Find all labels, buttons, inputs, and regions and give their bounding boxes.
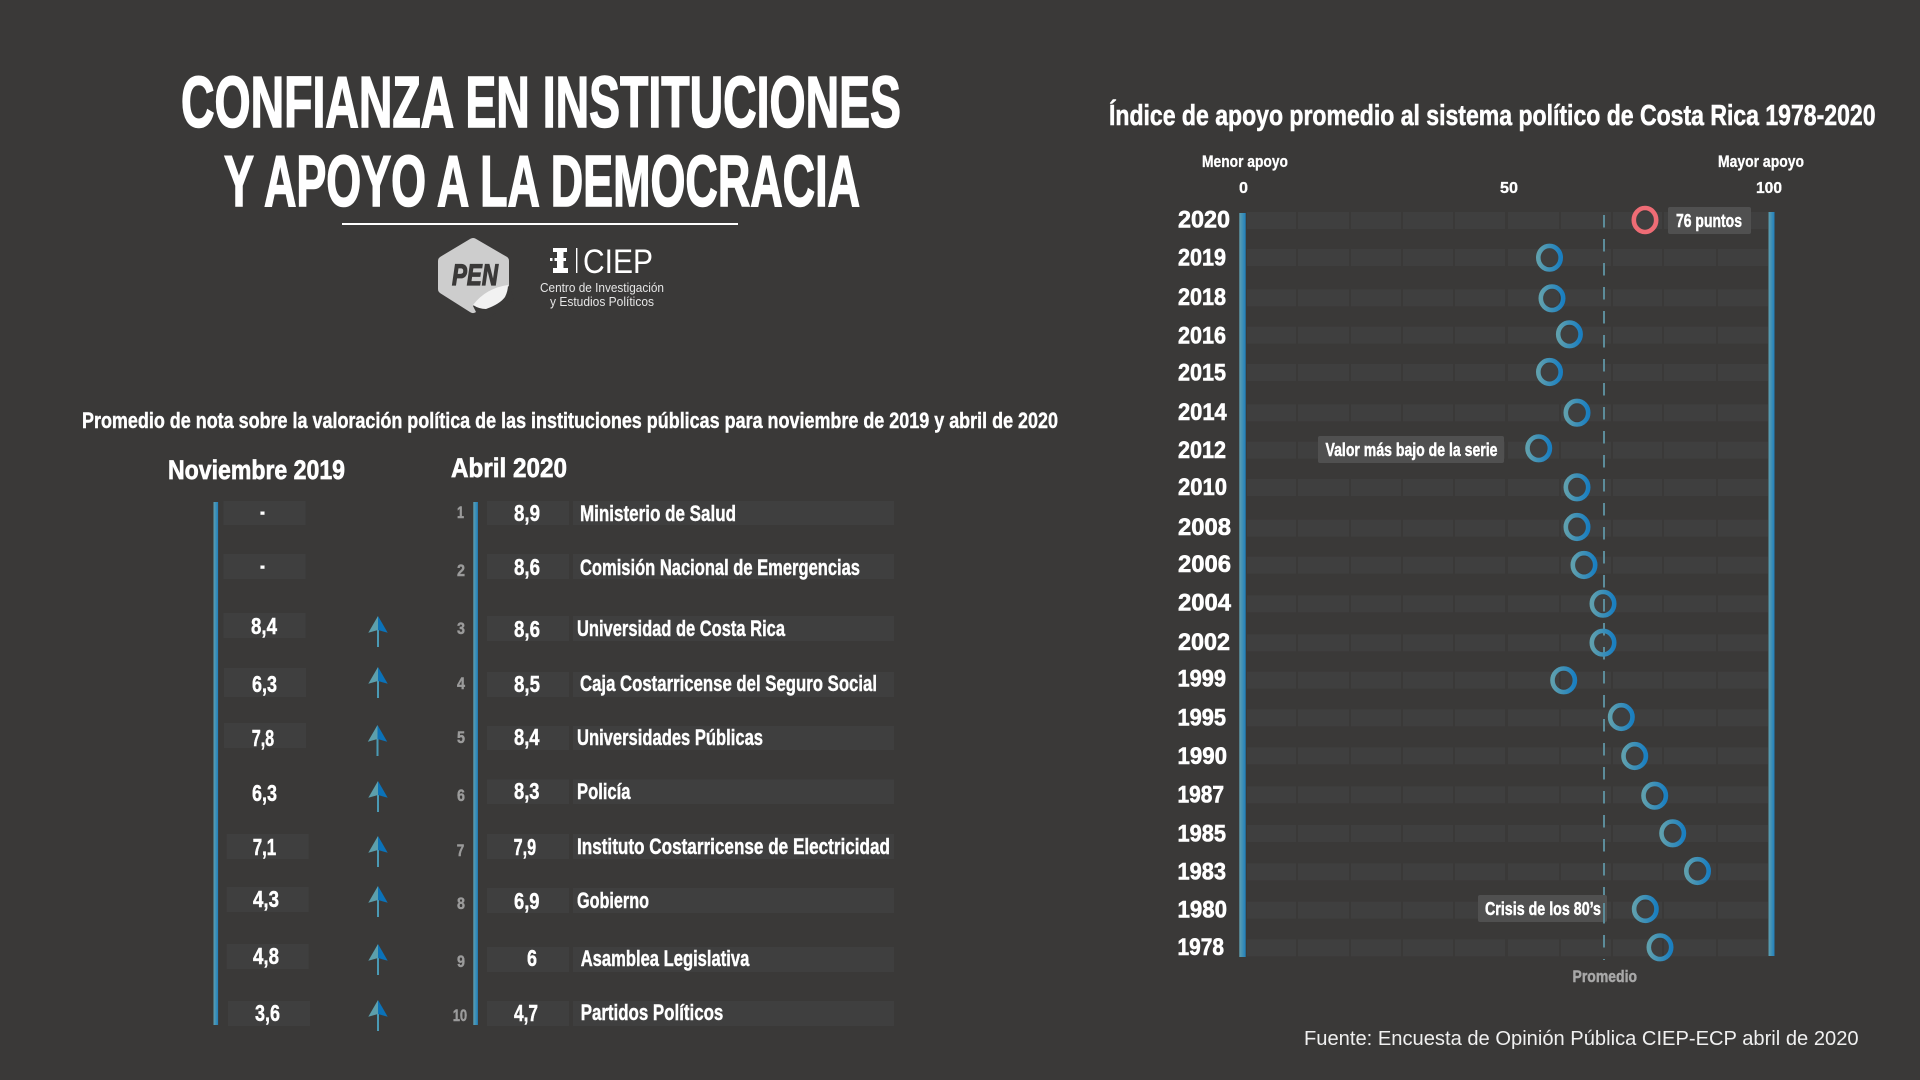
- year labels: 2014: [1178, 399, 1227, 426]
- row 10: Partidos Políticos: Partidos Políticos: [581, 1000, 723, 1025]
- callout: 76 puntos: [1668, 207, 1751, 234]
- value row 6: 6,3: [252, 780, 277, 806]
- row 5: Universidades Públicas: [457, 724, 894, 750]
- value row 3: [224, 613, 306, 639]
- chart: average dashed line: [1603, 215, 1605, 960]
- row 2: Comisión Nacional de Emergencias: [457, 554, 894, 580]
- year labels: 2010: [1178, 474, 1227, 501]
- year labels: 2008: [1178, 514, 1231, 541]
- value row 2: [224, 552, 306, 579]
- logo: PEN: PEN: [452, 259, 499, 292]
- title: Y APOYO A LA DEMOCRACIA: [224, 142, 860, 222]
- row 6: Policía: [457, 778, 894, 805]
- arrow row 10: [368, 1000, 388, 1031]
- callout: Crisis de los 80's: [1478, 895, 1607, 922]
- heading: Noviembre 2019: Noviembre 2019: [168, 455, 345, 485]
- label: Promedio: Promedio: [1572, 967, 1637, 986]
- axis labels: 50: [1500, 180, 1518, 197]
- row 10: Partidos Políticos: 4,7: [514, 1000, 538, 1026]
- value row 5: [224, 723, 306, 751]
- value row 3: 8,4: [251, 613, 277, 639]
- arrow row 9: [368, 944, 388, 975]
- row 2: Comisión Nacional de Emergencias: Comisión Nacional de Emergencias: [580, 555, 860, 580]
- row 2: Comisión Nacional de Emergencias: 2: [457, 561, 465, 580]
- row 2: Comisión Nacional de Emergencias: 8,6: [514, 554, 540, 580]
- row 1: Ministerio de Salud: Ministerio de Salud: [580, 501, 736, 526]
- year labels: 2020: [1178, 206, 1230, 233]
- year labels: [1178, 206, 1232, 961]
- row 7: Instituto Costarricense de Electricidad: [457, 834, 894, 860]
- value row 1: -: [260, 498, 265, 524]
- value row 4: [224, 668, 306, 697]
- chart: axis bars at 0 and 100: [1239, 212, 1774, 957]
- row 4: Caja Costarricense del Seguro Social: 4: [457, 674, 465, 693]
- heading: Abril 2020: Abril 2020: [451, 453, 567, 483]
- row 7: Instituto Costarricense de Electricidad: 7,9: [514, 834, 536, 860]
- row 7: Instituto Costarricense de Electricidad: Instituto Costarricense de Electricidad: [577, 834, 890, 859]
- panel: Abril 2020 ranking: [453, 500, 894, 1026]
- value row 7: 7,1: [253, 834, 276, 860]
- row 5: Universidades Públicas: Universidades Públicas: [577, 725, 763, 750]
- title: CONFIANZA EN INSTITUCIONES: [181, 63, 901, 143]
- year labels: 2015: [1178, 360, 1226, 387]
- value row 9: 4,8: [253, 943, 279, 969]
- arrow row 4: [368, 667, 388, 698]
- row 7: Instituto Costarricense de Electricidad: 7: [457, 841, 464, 860]
- year labels: 1978: [1178, 934, 1224, 961]
- arrow row 5: [368, 725, 387, 756]
- year labels: 1995: [1178, 705, 1226, 732]
- marker 2020: [1634, 208, 1656, 232]
- row 9: Asamblea Legislativa: Asamblea Legislativa: [581, 946, 750, 971]
- year labels: 2018: [1178, 284, 1226, 311]
- value row 10: 3,6: [255, 1000, 280, 1026]
- year labels: 1980: [1178, 897, 1227, 924]
- row 3: Universidad de Costa Rica: [457, 616, 894, 642]
- row 9: Asamblea Legislativa: 9: [457, 952, 465, 971]
- row 5: Universidades Públicas: 5: [457, 728, 465, 747]
- year labels: 1985: [1178, 821, 1226, 848]
- axis labels: Mayor apoyo: [1718, 153, 1804, 171]
- callout: Crisis de los 80's: Crisis de los 80’s: [1485, 899, 1601, 919]
- row 8: Gobierno: 6,9: [514, 888, 540, 914]
- value row 7: [227, 834, 309, 860]
- value row 10: [228, 1000, 310, 1026]
- row 3: Universidad de Costa Rica: Universidad de Costa Rica: [577, 616, 786, 641]
- value row 8: 4,3: [253, 886, 279, 912]
- row 1: Ministerio de Salud: 8,9: [514, 500, 540, 526]
- year labels: 2012: [1178, 437, 1226, 464]
- year labels: 1990: [1178, 743, 1227, 770]
- row 10: Partidos Políticos: 10: [453, 1006, 467, 1025]
- logo: PEN: [443, 243, 514, 320]
- arrows: increase since 2019: [368, 616, 388, 1031]
- row 9: Asamblea Legislativa: 6: [527, 945, 537, 971]
- source note: Fuente: Encuesta de Opinión Pública CIEP-ECP abril de 2020: [1304, 1027, 1859, 1050]
- row 3: Universidad de Costa Rica: 3: [457, 619, 465, 638]
- row 1: Ministerio de Salud: 1: [457, 503, 464, 522]
- value row 5: 7,8: [252, 725, 274, 751]
- title: [181, 63, 901, 222]
- row 6: Policía: 8,3: [514, 778, 540, 804]
- row 4: Caja Costarricense del Seguro Social: [457, 671, 894, 697]
- arrow row 7: [368, 836, 388, 867]
- callout: Valor más bajo de la serie: Valor más bajo de la serie: [1326, 440, 1498, 460]
- year labels: 2019: [1178, 245, 1226, 272]
- logo: CIEP: y Estudios Políticos: [550, 295, 654, 309]
- year labels: 1983: [1178, 858, 1226, 885]
- year labels: 1999: [1178, 666, 1226, 693]
- row 8: Gobierno: 8: [457, 894, 465, 913]
- value row 1: [224, 498, 306, 525]
- row 5: Universidades Públicas: 8,4: [514, 724, 540, 750]
- row 6: Policía: Policía: [577, 779, 631, 804]
- row 3: Universidad de Costa Rica: 8,6: [514, 616, 540, 642]
- callout: 76 puntos: 76 puntos: [1676, 211, 1742, 231]
- row 4: Caja Costarricense del Seguro Social: Caja Costarricense del Seguro Social: [580, 671, 877, 696]
- row 8: Gobierno: [457, 888, 894, 914]
- row 6: Policía: 6: [457, 786, 465, 805]
- row 9: Asamblea Legislativa: [457, 945, 894, 972]
- row 1: Ministerio de Salud: [457, 500, 894, 526]
- logo: CIEP: CIEP: [583, 243, 653, 281]
- callout: Valor más bajo de la serie: [1318, 436, 1504, 463]
- year labels: 2006: [1178, 551, 1231, 578]
- row 8: Gobierno: Gobierno: [577, 888, 649, 913]
- year labels: 2002: [1178, 629, 1230, 656]
- panel: Noviembre 2019 values: [214, 498, 310, 1026]
- row 4: Caja Costarricense del Seguro Social: 8,5: [514, 671, 540, 697]
- axis labels: 0: [1239, 180, 1248, 197]
- row 10: Partidos Políticos: [453, 1000, 894, 1026]
- logo: CIEP: Centro de Investigación: [540, 281, 664, 295]
- year labels: 2004: [1178, 590, 1232, 617]
- chart: data point markers: [1528, 208, 1709, 959]
- axis labels: 100: [1756, 180, 1782, 197]
- axis labels: [1202, 153, 1804, 197]
- subtitle: institutions table: Promedio de nota sobre la valoración política de las instituciones públicas para noviembre de 2019 y abril de 2020: [82, 408, 1058, 433]
- arrow row 3: [368, 616, 388, 647]
- year labels: 2016: [1178, 322, 1226, 349]
- year labels: 1987: [1178, 782, 1224, 809]
- axis labels: Menor apoyo: [1202, 153, 1288, 171]
- arrow row 8: [368, 886, 388, 917]
- value row 2: -: [260, 552, 265, 578]
- value row 4: 6,3: [252, 671, 277, 697]
- logo: CIEP: [540, 243, 664, 309]
- chart: bands: [1247, 212, 1768, 956]
- value row 8: [227, 886, 309, 912]
- arrow row 6: [368, 781, 388, 812]
- value row 9: [227, 943, 309, 969]
